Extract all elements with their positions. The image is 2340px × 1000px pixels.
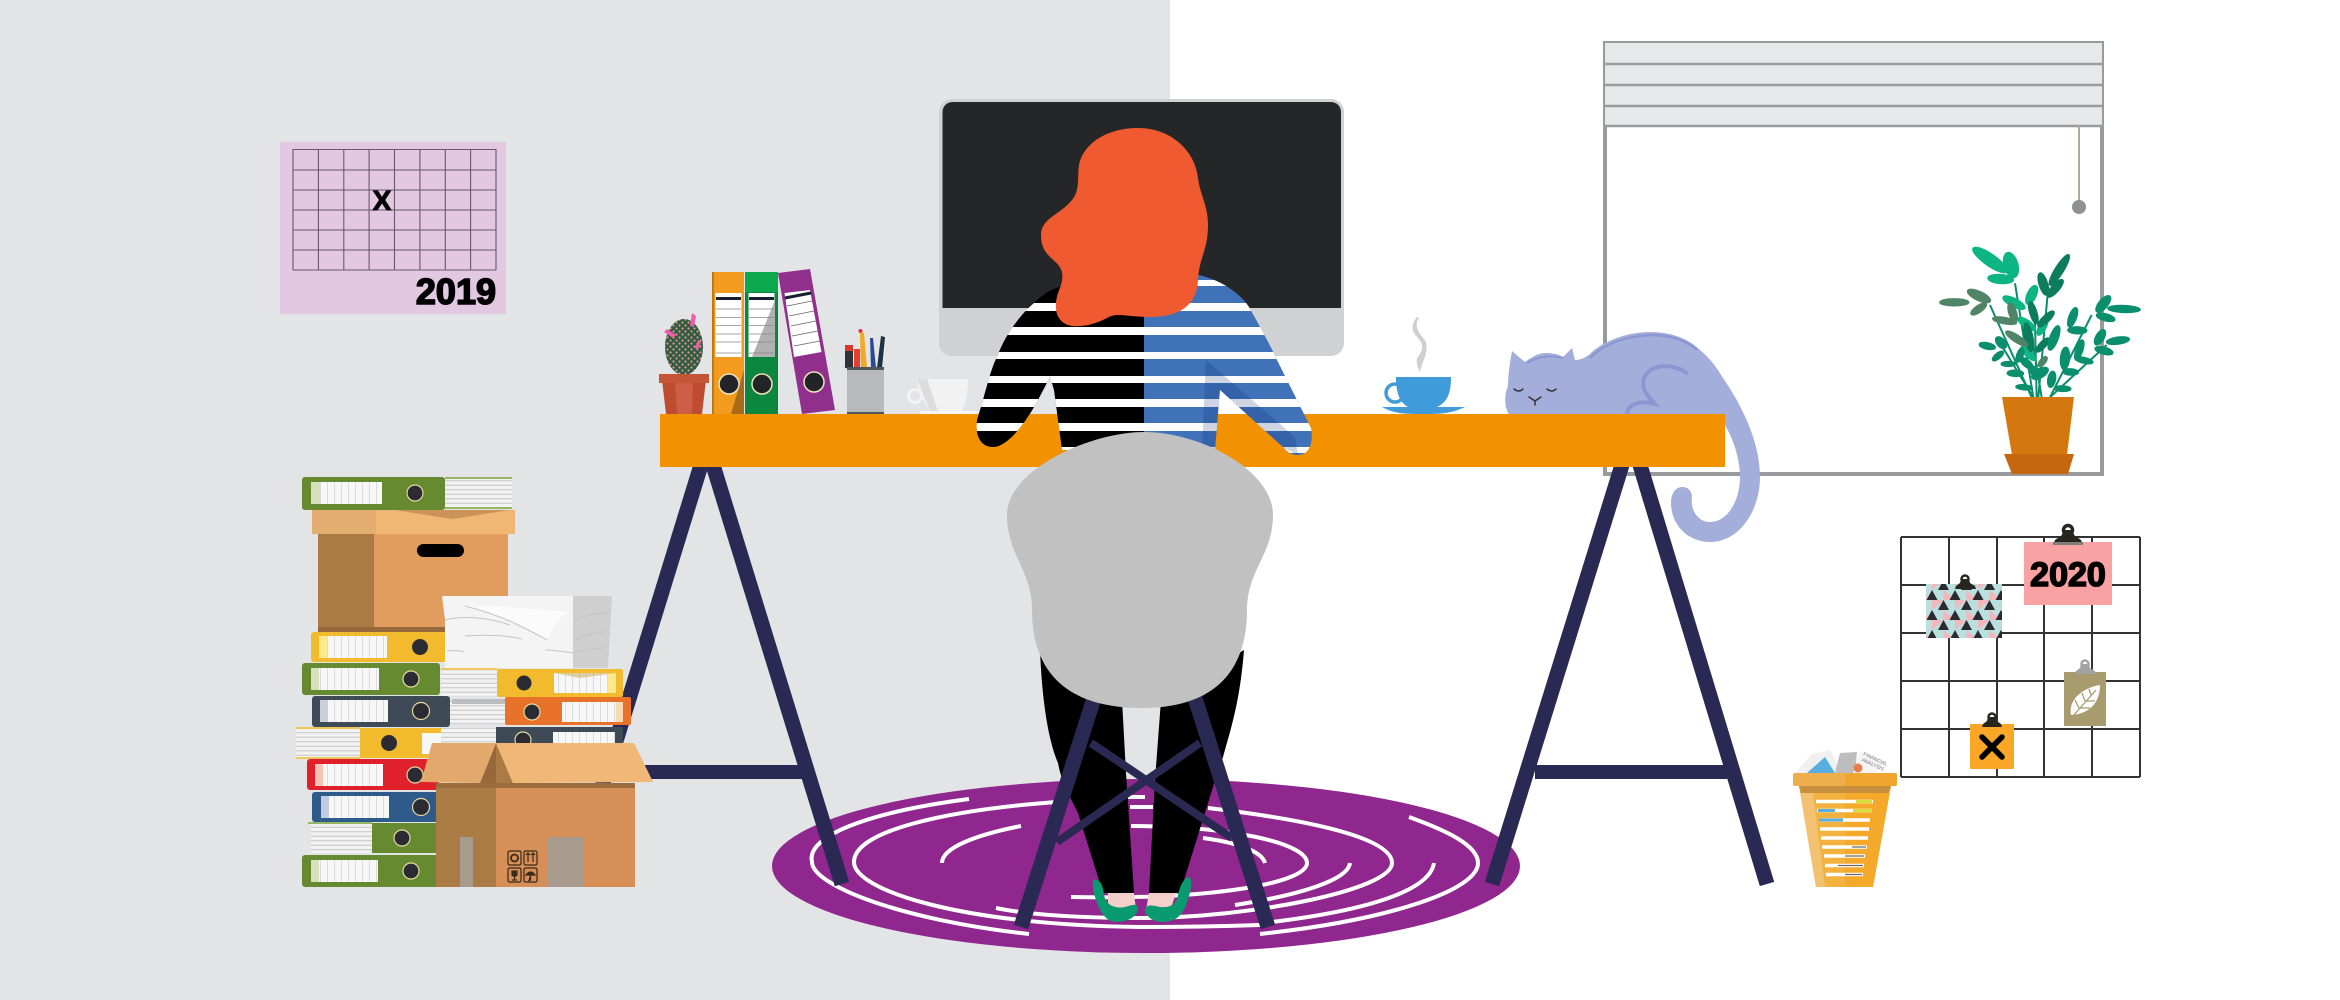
- steam: [1413, 317, 1427, 372]
- rug swirl lines: [812, 797, 1478, 934]
- person hair: [1041, 128, 1208, 326]
- calendar mark: X: [373, 185, 392, 216]
- sleeping cat: [1505, 332, 1760, 542]
- calendar 2019: [280, 142, 506, 314]
- person legs: [1040, 650, 1244, 922]
- box inner flaps: [480, 743, 496, 783]
- box tape: [460, 837, 473, 887]
- patterned note: [1926, 576, 2002, 638]
- cactus pot: [659, 374, 709, 414]
- orange folder, right pile: [450, 697, 631, 725]
- pen pot: [845, 329, 885, 414]
- paper stack: [442, 596, 612, 668]
- stack of boxes and folders: [296, 477, 653, 887]
- plant in pot: [1940, 244, 2140, 474]
- background: white right half: [1170, 0, 2340, 1000]
- wire memo board: [1901, 526, 2140, 777]
- chair back: [1007, 432, 1273, 708]
- green folder bottom: [302, 855, 439, 887]
- desk frame: right trestle: [1492, 465, 1767, 884]
- pot saucer: [2004, 454, 2074, 474]
- white coffee cup: [908, 379, 977, 414]
- crumpled papers: [1795, 750, 1889, 773]
- left box flap: [421, 743, 496, 783]
- blue folder: [312, 792, 439, 822]
- handling icons: [508, 851, 537, 882]
- right shoe: [1145, 877, 1191, 922]
- green folder top: [302, 477, 512, 510]
- window with roller blind: [1603, 43, 2104, 474]
- stool legs: [1021, 695, 1268, 927]
- plant pot: [2002, 397, 2074, 455]
- pens and pencils: [845, 329, 885, 368]
- computer monitor: [939, 99, 1344, 356]
- purple binder: [778, 269, 835, 414]
- basket slits: [1816, 802, 1873, 874]
- yellow folder reversed: [296, 728, 442, 758]
- blind pull cord: [2072, 126, 2086, 214]
- blue coffee cup: [1382, 317, 1465, 414]
- orange X note: [1970, 714, 2014, 769]
- striped rug: [772, 779, 1520, 953]
- jumper stripes: [960, 280, 1324, 453]
- paper caption: ANALYSIS: [1861, 757, 1885, 773]
- roller blind: [1603, 43, 2104, 126]
- green folder reversed: [308, 823, 439, 853]
- yellow folder: [311, 632, 446, 662]
- paper caption: FINANCIAL: [1862, 751, 1888, 768]
- desk top: [660, 414, 1725, 467]
- background: grey left half: [0, 0, 1170, 1000]
- right box flap: [496, 743, 653, 783]
- leaf note: [2064, 660, 2106, 726]
- back archive box: [312, 510, 515, 632]
- desk frame: left trestle: [572, 465, 842, 884]
- calendar year: 2019: [416, 271, 496, 312]
- plant foliage: [1940, 244, 2140, 397]
- cactus body: [664, 313, 703, 375]
- yellow folder, right pile: [441, 669, 623, 697]
- cat face: [1514, 389, 1556, 405]
- green binder: [745, 272, 778, 414]
- cactus in pot: [659, 313, 709, 414]
- slate folder, right pile: [441, 727, 623, 748]
- left shoe: [1093, 880, 1138, 922]
- red folder: [307, 759, 439, 790]
- arm shading: [1202, 360, 1298, 455]
- cat shading: [1527, 335, 1697, 414]
- feet: [1108, 893, 1176, 915]
- pink note 2020: [2024, 526, 2112, 605]
- open cardboard box: [421, 743, 653, 887]
- wastepaper basket: [1793, 750, 1897, 887]
- slate folder: [312, 696, 450, 727]
- green folder: [302, 663, 440, 695]
- orange binder: [712, 272, 744, 414]
- person torso in striped jumper: [976, 275, 1312, 455]
- pink note 2020: 2020: [2030, 556, 2106, 594]
